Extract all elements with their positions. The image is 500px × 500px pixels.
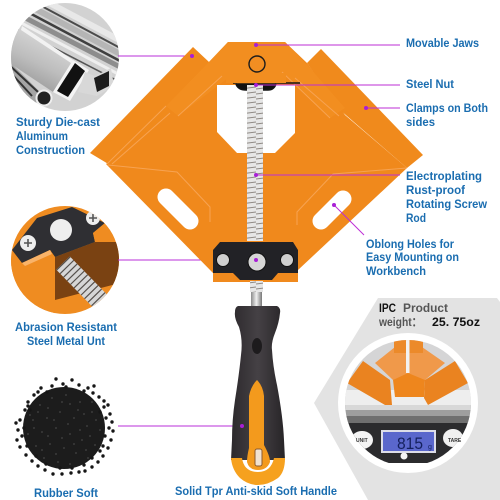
main frame [106, 42, 407, 282]
leader: clamps [366, 107, 400, 109]
marker: metal unit [254, 258, 258, 262]
label: abrasion resistant [15, 320, 117, 348]
handle grip [231, 306, 285, 460]
label: screw rod: Rotating Screw [406, 197, 488, 211]
brand: IPC [379, 301, 396, 315]
white ring [338, 333, 478, 473]
label: clamps on both sides: sides [406, 115, 435, 129]
steel nut [233, 83, 300, 90]
label: oblong holes: Oblong Holes for [366, 237, 454, 251]
lower bracket [213, 242, 298, 282]
right jaw [307, 49, 423, 168]
label: abrasion resistant: Abrasion Resistant [15, 320, 117, 334]
label: steel nut: Steel Nut [406, 77, 454, 91]
highlights [107, 72, 407, 225]
right slot [321, 199, 343, 221]
left slot [166, 197, 190, 221]
lower threaded stem [250, 281, 263, 292]
product: Product [403, 301, 448, 315]
label: oblong holes [366, 237, 459, 278]
left jaw [90, 47, 209, 165]
photo: aluminum profiles [11, 3, 119, 111]
leader: steel nut [256, 84, 400, 86]
scale photo [338, 333, 478, 473]
leader lines and markers [190, 43, 400, 428]
upper jaw block [166, 42, 345, 118]
label: screw rod: Electroplating [406, 169, 482, 183]
panel: scale weight background [314, 298, 500, 500]
screwdriver handle [231, 306, 285, 485]
marker: oblong holes [332, 203, 336, 207]
label: screw rod: Rod [406, 211, 426, 225]
scale reading: 815 [397, 434, 423, 453]
label: aluminum construction: Aluminum [16, 129, 68, 143]
label: movable jaws: Movable Jaws [406, 36, 479, 50]
label: abrasion resistant: Steel Metal Unt [27, 334, 105, 348]
label: clamps on both sides: Clamps on Both [406, 101, 488, 115]
scale image [345, 340, 471, 463]
handle slot [255, 449, 262, 466]
leader: metal unit [118, 259, 256, 261]
button: unit: UNIT [356, 438, 368, 444]
weight word: weight： [378, 315, 422, 329]
screw rod [247, 85, 263, 241]
pin hole [249, 56, 265, 72]
handle end cap [231, 458, 285, 485]
marker: movable jaws [254, 43, 258, 47]
label: aluminum construction [16, 115, 100, 157]
corner clamp body [90, 42, 423, 306]
reading unit: g [428, 444, 432, 451]
marker: clamps [364, 106, 368, 110]
orange inlay [247, 380, 270, 470]
window [217, 85, 295, 153]
label: handle: Solid Tpr Anti-skid Soft Handle [175, 484, 337, 498]
leader: rubber [118, 425, 242, 427]
marker: steel nut [254, 83, 258, 87]
leader: screw rod [256, 174, 400, 176]
button: tare: TARE [448, 438, 462, 444]
marker: screw rod [254, 173, 258, 177]
grip dimple [252, 338, 262, 354]
label: rubber soft: Rubber Soft [34, 486, 98, 500]
marker: aluminum [190, 54, 194, 58]
leader: movable jaws [256, 44, 400, 46]
photo: abrasion resistant metal unit [10, 205, 120, 315]
label: clamps on both sides [406, 101, 488, 129]
marker: rubber [240, 424, 244, 428]
weight label [378, 301, 480, 329]
leader: aluminum [118, 55, 192, 57]
label: screw rod: Rust-proof [406, 183, 466, 197]
weight value: 25. 75oz [432, 315, 480, 329]
label: oblong holes: Easy Mounting on [366, 250, 459, 264]
label: oblong holes: Workbench [366, 264, 426, 278]
label: aluminum construction: Construction [16, 143, 85, 157]
leader: oblong holes [334, 205, 364, 235]
label: aluminum construction: Sturdy Die-cast [16, 115, 100, 129]
photo: rubber granules [16, 379, 113, 474]
label: screw rod [406, 169, 488, 225]
